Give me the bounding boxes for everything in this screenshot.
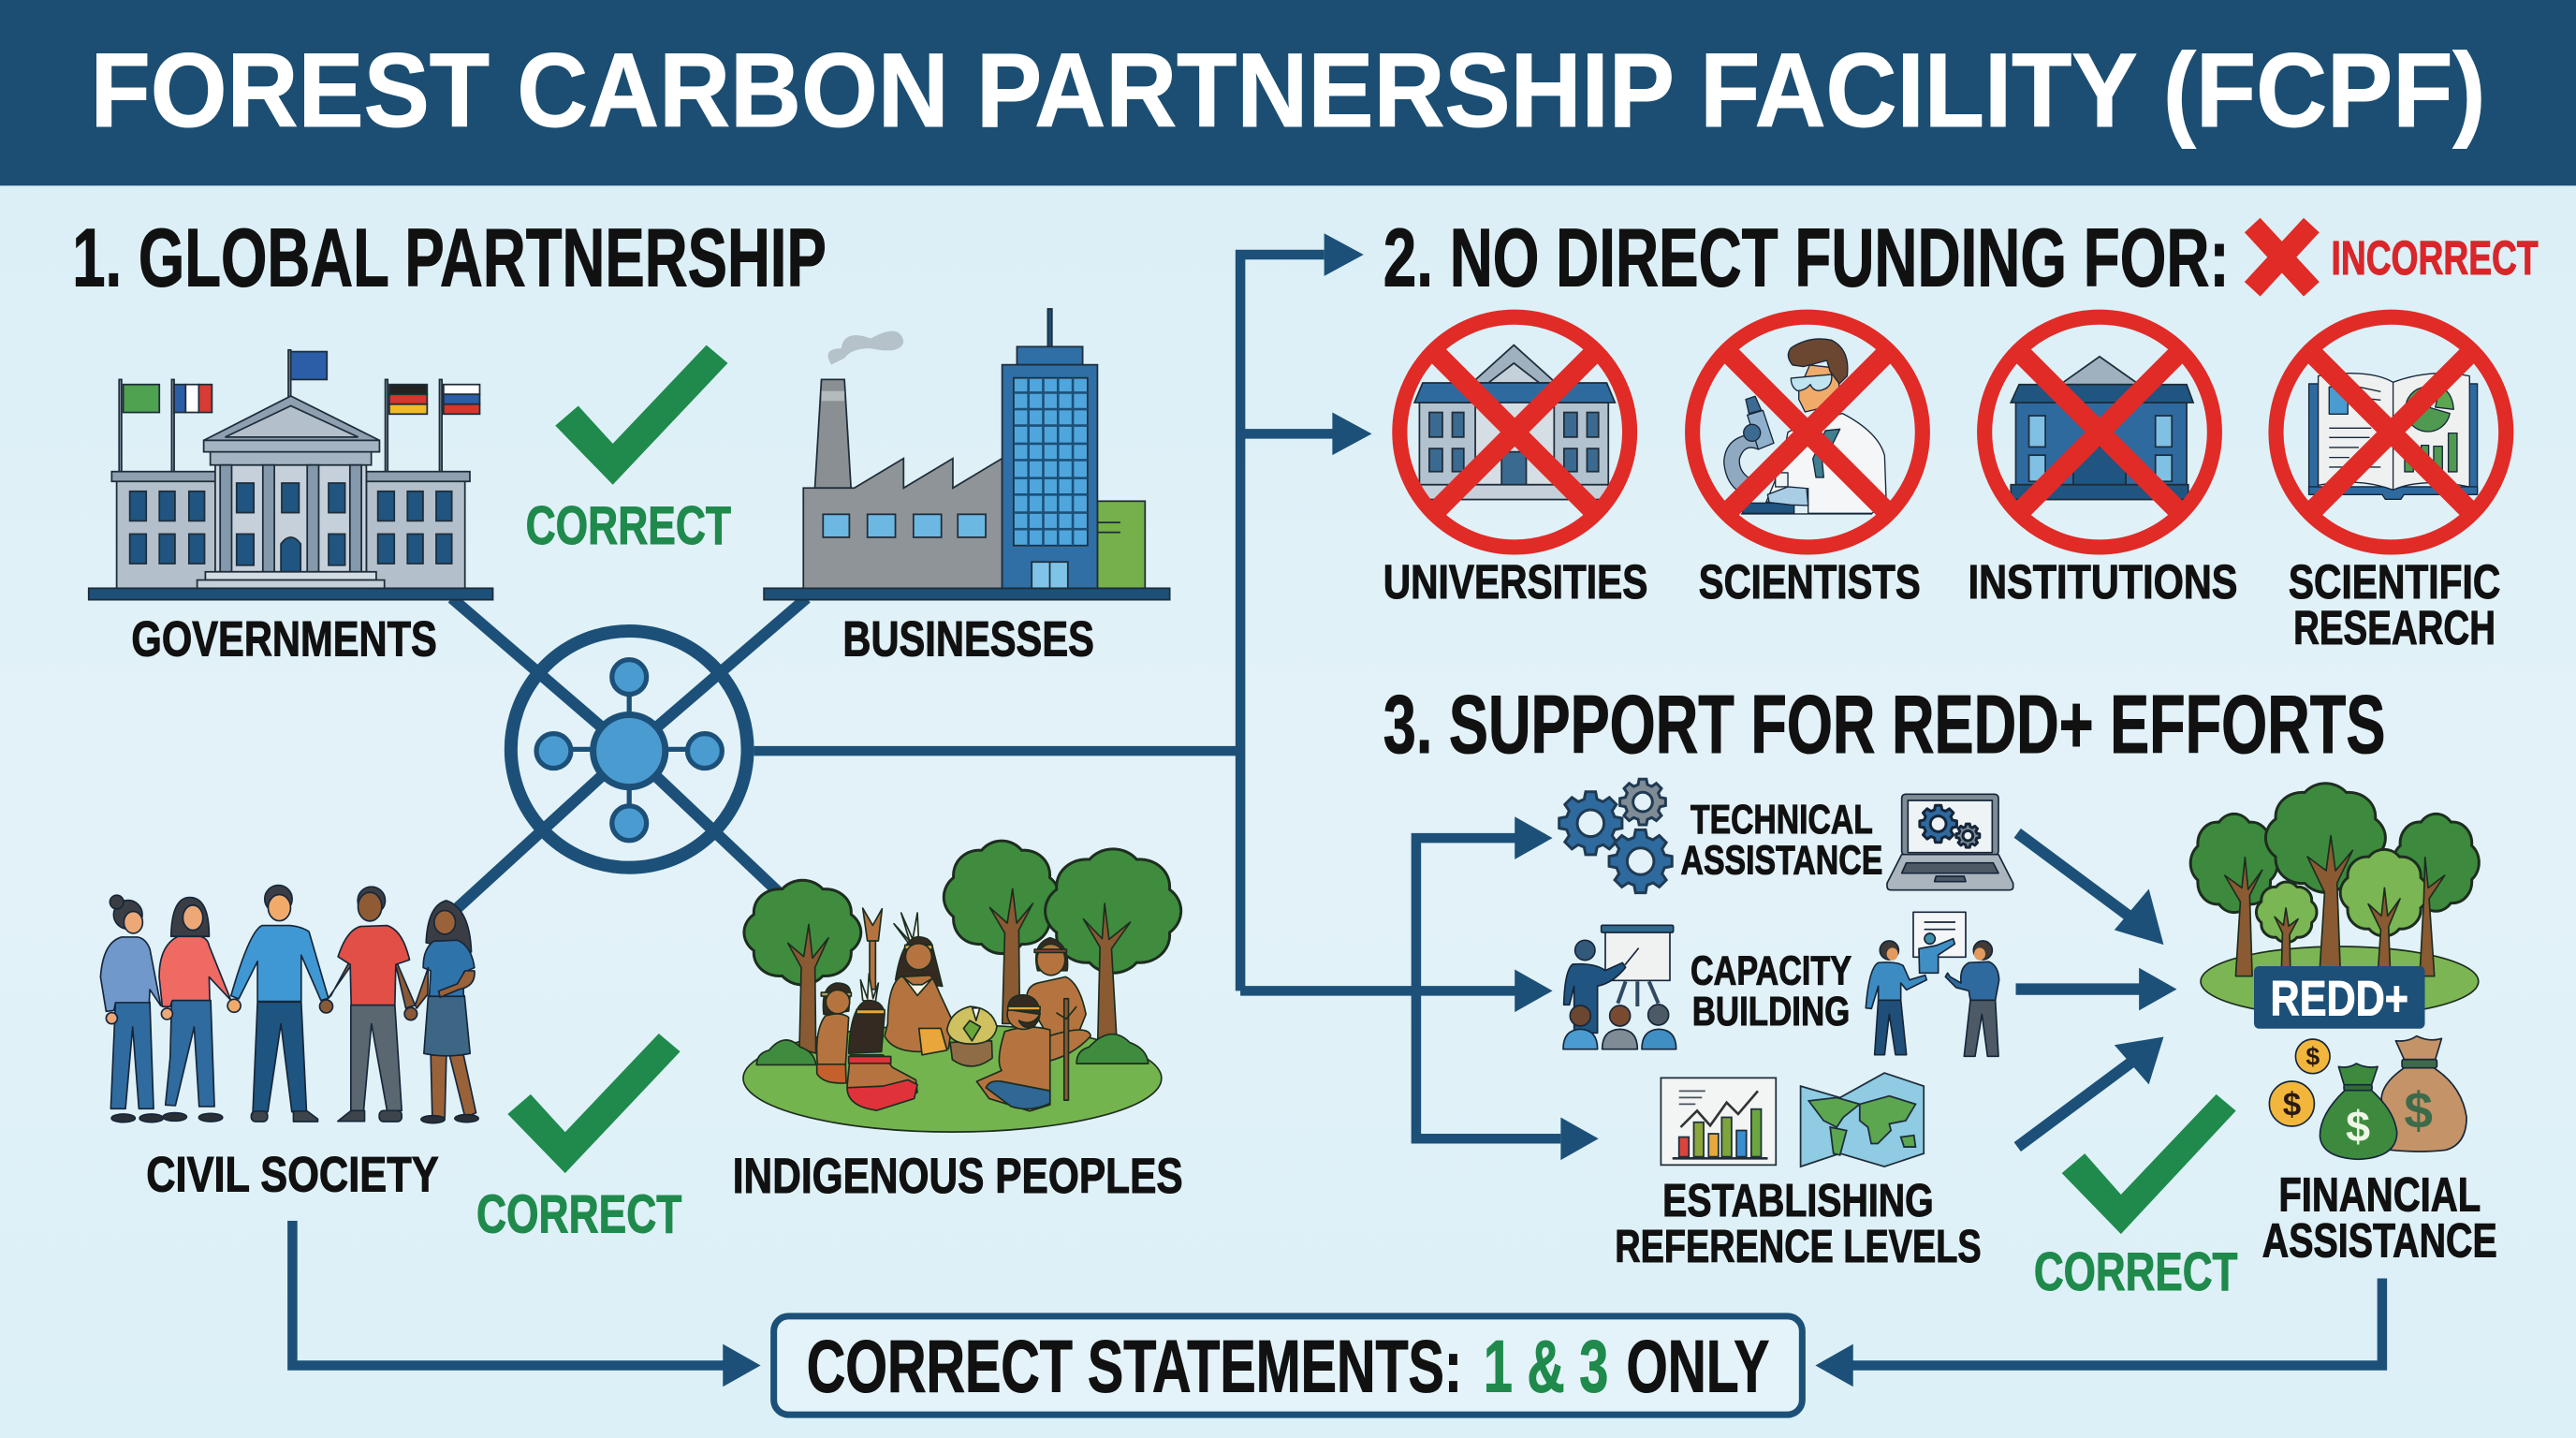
conclusion text lead: CORRECT STATEMENTS: [807, 1326, 1462, 1408]
icon: indigenous peoples gathered under trees [743, 841, 1181, 1132]
person 1 [100, 895, 163, 1123]
icon: world map [1801, 1073, 1924, 1167]
title banner [0, 0, 2576, 185]
icon: trainer with flip chart and audience [1563, 925, 1676, 1049]
conclusion box [774, 1316, 1802, 1415]
person: chief with feathers [863, 908, 952, 1055]
label: correct: CORRECT [526, 496, 731, 556]
section 3 branching arrows [1416, 816, 1599, 1160]
icon: coins and money bags: $ [2305, 1043, 2320, 1071]
arrow: technical assistance to REDD+ [2017, 833, 2163, 945]
title banner: FOREST CARBON PARTNERSHIP FACILITY (FCPF) [91, 31, 2485, 149]
connector lines: partner links to central hub [452, 598, 807, 909]
central hub network icon [511, 631, 748, 868]
label: capacity building: BUILDING [1692, 989, 1850, 1034]
label: technical assistance [1680, 797, 1882, 884]
label: governments: GOVERNMENTS [131, 611, 437, 667]
icon: laptop with gears [1887, 794, 2013, 890]
person 2 [159, 898, 231, 1122]
flow arrows from hub into sections 2 and 3 [754, 233, 1416, 990]
conclusion only: ONLY [1627, 1326, 1769, 1408]
label: financial assistance [2262, 1168, 2497, 1268]
icon: reference chart [1661, 1078, 1776, 1165]
no-funding icon: institutions [1984, 317, 2215, 547]
label: civil society: CIVIL SOCIETY [146, 1147, 439, 1202]
icon: coins and money bags: $ [2346, 1102, 2370, 1151]
arrow: financial assistance to conclusion [1815, 1278, 2382, 1387]
label: scientists: SCIENTISTS [1699, 555, 1921, 609]
icon: civil society people holding hands [100, 886, 478, 1123]
heading: 2. no direct funding for: 2. NO DIRECT FUNDING FOR: [1383, 212, 2230, 303]
person 4 [328, 887, 417, 1122]
person 3 [227, 886, 332, 1122]
icon: check mark, correct [2062, 1094, 2236, 1234]
person 5 [404, 901, 478, 1123]
label: institutions: INSTITUTIONS [1969, 555, 2237, 609]
woven basket with leaf [947, 1006, 997, 1066]
conclusion numbers: 1 & 3 [1484, 1326, 1608, 1408]
label: scientific research [2289, 555, 2500, 654]
label: technical assistance: TECHNICAL [1690, 797, 1873, 843]
label: establishing reference levels: ESTABLISHING [1662, 1176, 1934, 1226]
person: child at left [817, 983, 851, 1083]
label: universities: UNIVERSITIES [1383, 555, 1647, 609]
icon: coins and money bags: $ [2283, 1087, 2301, 1123]
icon: gears [1559, 779, 1672, 893]
label: establishing reference levels: REFERENCE LEVELS [1615, 1222, 1982, 1272]
icon: red cross, incorrect [2252, 225, 2311, 289]
no-funding icon: scientific research [2276, 317, 2506, 547]
label: financial assistance: FINANCIAL [2278, 1168, 2481, 1222]
label: capacity building [1690, 947, 1852, 1034]
label: establishing reference levels [1615, 1176, 1982, 1272]
label: correct: CORRECT [2034, 1242, 2237, 1302]
label: correct: CORRECT [476, 1184, 681, 1244]
label: financial assistance: ASSISTANCE [2262, 1214, 2497, 1268]
person: woman with red wrap [847, 974, 917, 1110]
icon: government building with flags [89, 350, 493, 600]
arrow: capacity building to REDD+ [2016, 968, 2177, 1010]
arrow: civil society to conclusion [292, 1221, 761, 1387]
label: capacity building: CAPACITY [1690, 947, 1852, 993]
label: businesses: BUSINESSES [842, 611, 1094, 667]
icon: two people at a board [1866, 912, 1999, 1056]
REDD+ badge: REDD+ [2271, 972, 2408, 1027]
icon: check mark, correct [555, 345, 728, 485]
heading: 1. global partnership: 1. GLOBAL PARTNERSHIP [72, 212, 827, 303]
icon: check mark, correct [507, 1034, 681, 1173]
icon: coins and money bags: $ [2404, 1081, 2433, 1139]
label: scientific research: RESEARCH [2293, 601, 2496, 654]
no-funding icon: scientists [1692, 317, 1923, 547]
label: technical assistance: ASSISTANCE [1680, 838, 1882, 884]
icon: factory and office tower [764, 309, 1170, 600]
arrow: reference levels to REDD+ [2017, 1036, 2163, 1147]
icon: coins and money bags [2269, 1036, 2466, 1159]
label: scientific research: SCIENTIFIC [2289, 555, 2500, 609]
icon: REDD+ forest [2190, 784, 2479, 1017]
person: front right with blue wrap [976, 995, 1076, 1111]
person: figure at right rear [1027, 938, 1090, 1061]
no-funding icon: universities [1399, 317, 1630, 547]
label: indigenous peoples: INDIGENOUS PEOPLES [733, 1149, 1183, 1204]
